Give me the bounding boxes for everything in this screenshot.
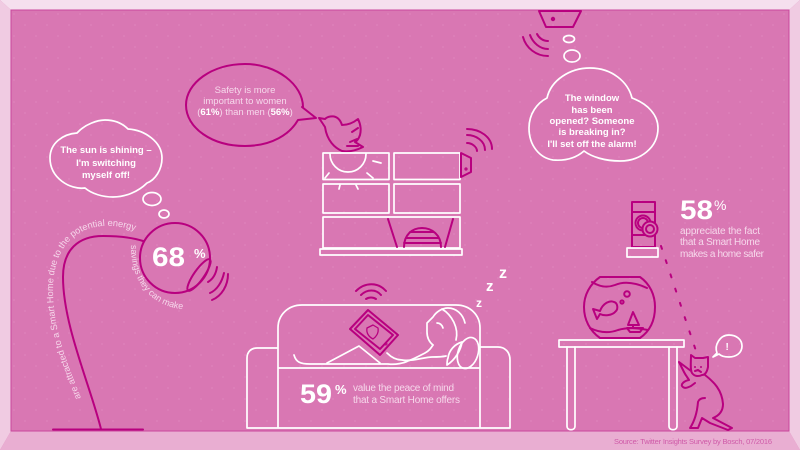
stat text: peace of mind: that a Smart Home offers <box>353 395 460 406</box>
icon: bird <box>319 116 363 151</box>
table <box>559 340 684 430</box>
bubble text: alarm: has been <box>571 105 613 116</box>
speech text: (61%) than men (56%) <box>197 107 293 118</box>
panel: window and bird <box>186 64 492 255</box>
panel: sofa 59% <box>247 265 510 428</box>
panel: alarm camera <box>523 11 658 161</box>
bubble text: alarm: I'll set off the alarm! <box>547 139 637 150</box>
stat text: safer: appreciate the fact <box>680 226 760 237</box>
zzz: z <box>486 278 494 295</box>
window <box>320 153 462 255</box>
stat text: safer: that a Smart Home <box>680 237 760 248</box>
bubble text: alarm: The window <box>565 93 620 104</box>
icon: robot vacuum <box>388 219 453 247</box>
icon: cat <box>679 355 732 430</box>
panel: fishbowl, camera, cat <box>559 195 765 430</box>
icon: security camera <box>632 202 658 247</box>
cat speech bubble <box>713 335 742 357</box>
camera base <box>627 248 658 257</box>
zzz <box>476 265 507 310</box>
icon: window sensor <box>461 129 492 177</box>
panel: lamp 68% <box>46 119 229 430</box>
stat text: safer: makes a home safer <box>680 249 765 260</box>
zzz: z <box>499 265 507 282</box>
laser beam <box>661 246 697 354</box>
speech text: important to women <box>203 96 287 107</box>
cat speech bubble: ! <box>726 342 729 353</box>
curved text: attracted: are attracted to a Smart Home due to the potential energy <box>46 219 136 399</box>
lamp <box>53 223 228 430</box>
stat: 58%: 58 <box>680 195 713 225</box>
bubble text: sun: The sun is shining – <box>60 145 152 156</box>
icon: ceiling camera <box>523 11 581 56</box>
stat: 68% <box>152 242 206 272</box>
icon: tablet <box>350 284 398 355</box>
fishbowl <box>584 277 655 338</box>
stat: 58%: % <box>714 197 726 213</box>
speech text: Safety is more <box>215 85 275 96</box>
stat: 68%: 68 <box>152 242 185 272</box>
stat: 59%: % <box>335 382 347 397</box>
source: Source: Twitter Insights Survey by Bosch, 07/2016 <box>614 437 772 446</box>
stat: 59%: 59 <box>300 379 332 409</box>
sofa <box>247 305 510 428</box>
stat: 59% <box>300 379 347 409</box>
bubble text: alarm: opened? Someone <box>550 116 634 127</box>
curved text: savings: savings they can make <box>130 245 183 309</box>
stat: 68%: % <box>194 246 206 261</box>
bubble text: sun: myself off! <box>82 170 130 181</box>
thought bubble: sun <box>50 120 169 218</box>
bubble text: sun: I'm switching <box>76 158 136 169</box>
thought bubble: alarm <box>529 36 658 161</box>
bubble text: alarm: is breaking in? <box>558 127 626 138</box>
person <box>294 308 482 371</box>
stat text: peace of mind: value the peace of mind <box>353 383 454 394</box>
zzz: z <box>476 296 482 310</box>
speech bubble <box>186 64 316 146</box>
stat: 58% <box>680 195 726 225</box>
